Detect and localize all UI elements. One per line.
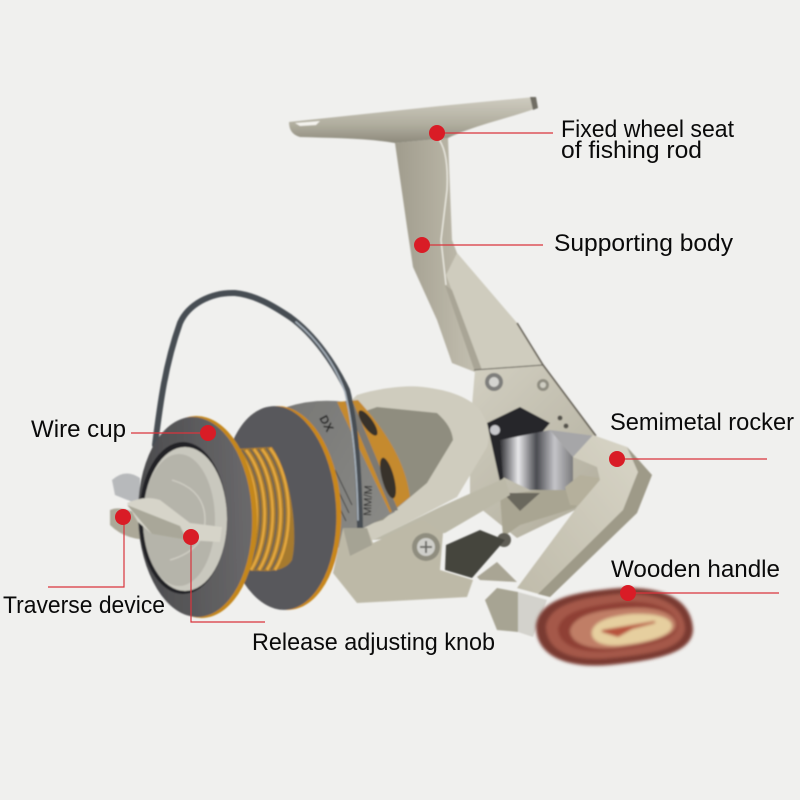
illustration: spinning reel: [110, 97, 652, 637]
rear spool flange: [215, 402, 348, 614]
label: wire cup: Wire cup: [31, 416, 126, 443]
drum with scale: DX: [316, 413, 337, 434]
rotor rear cup: [330, 386, 510, 545]
wooden handle: [536, 588, 693, 666]
crank arm: [485, 435, 652, 637]
drum with scale: MM/M: [362, 485, 375, 516]
front spool flange (wire cup): [110, 414, 260, 620]
chrome gear housing: [487, 407, 600, 511]
label: fixed wheel seat: of fishing rod: [561, 137, 702, 164]
bail wire front section: [290, 317, 360, 527]
marker dots: [115, 125, 636, 601]
leader lines: [48, 133, 779, 622]
bail wire rear section: [155, 293, 290, 445]
label: wooden handle: Wooden handle: [611, 556, 780, 583]
drum with scale: [287, 400, 410, 590]
label: fixed wheel seat: Fixed wheel seat: [561, 116, 734, 143]
label: fixed wheel seat: [561, 116, 734, 164]
label: release adjusting knob: Release adjusting knob: [252, 629, 495, 656]
label: supporting body: Supporting body: [554, 230, 733, 257]
label: semimetal rocker: Semimetal rocker: [610, 409, 794, 436]
seat and supporting body: [289, 97, 543, 372]
label: traverse device: Traverse device: [3, 592, 165, 619]
base plate: [470, 323, 640, 547]
line coil: [232, 447, 294, 571]
bail holder arm: [333, 520, 517, 603]
